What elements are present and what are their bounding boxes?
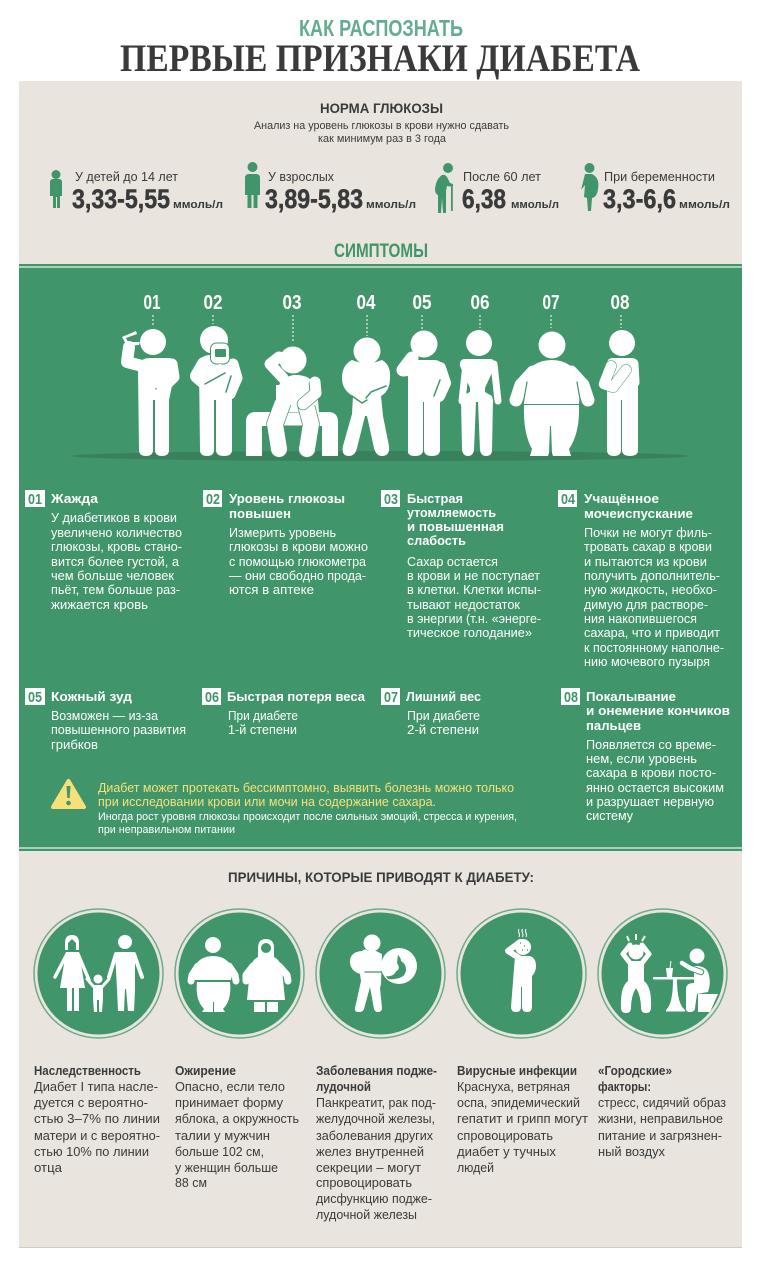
- stat: after 60: 6,38: [462, 184, 506, 214]
- symptom 07: Лишний вес: [406, 689, 481, 704]
- figure 03: fatigue: [246, 292, 338, 456]
- symptom 04: сахара, что и приводит: [584, 626, 720, 640]
- symptom 01: увеличено количество: [51, 526, 182, 540]
- icon: child: [50, 170, 62, 208]
- symptom 04: Учащённое: [584, 491, 659, 506]
- symptom 02: повышен: [229, 506, 291, 521]
- title: ПЕРВЫЕ ПРИЗНАКИ ДИАБЕТА: [120, 37, 640, 80]
- icon: adult: [245, 162, 260, 208]
- stat: after 60: После 60 лет: [463, 169, 541, 184]
- symptom 03: слабость: [407, 533, 466, 548]
- cause text: urban factors: [598, 1064, 726, 1159]
- cause text: obesity: Опасно, если тело: [175, 1080, 285, 1094]
- title: КАК РАСПОЗНАТЬ: [299, 15, 463, 41]
- symptom 07: 07: [384, 689, 398, 706]
- cause text: urban factors: питание и загрязнен-: [598, 1129, 722, 1143]
- figure 01: thirst: [122, 292, 176, 456]
- symptom 04: к постоянному наполне-: [584, 641, 724, 655]
- cause text: pancreas: секреции – могут: [316, 1161, 421, 1175]
- symptom 04: ную жидкость, необхо-: [584, 583, 717, 597]
- symptom 07: [381, 688, 481, 737]
- symptom 01: глюкозы, кровь стано-: [51, 540, 182, 554]
- icon: urban factors: [598, 909, 727, 1038]
- stat: pregnancy: 3,3-6,6: [603, 184, 676, 214]
- heading: symptoms: СИМПТОМЫ: [334, 241, 428, 262]
- symptom 01: 01: [28, 491, 42, 508]
- symptom 03: в энергии (т.н. «энерге-: [407, 612, 541, 626]
- cause text: heredity: Диабет I типа насле-: [34, 1080, 158, 1094]
- stat: adults: ммоль/л: [366, 199, 416, 211]
- symptom 06: 06: [205, 689, 219, 706]
- cause text: obesity: 88 см: [175, 1176, 207, 1190]
- symptom 01: чем больше человек: [51, 569, 175, 583]
- cause text: heredity: стью 3–7% по линии: [34, 1112, 160, 1126]
- cause text: obesity: принимает форму: [175, 1096, 284, 1110]
- callout: warning: Диабет может протекать бессимптомно, выявить болезнь можно только: [98, 781, 514, 795]
- callout: warning: при неправильном питании: [98, 824, 235, 836]
- cause text: obesity: яблока, а окружность: [175, 1112, 299, 1126]
- symptom 02: ются в аптеке: [229, 583, 314, 597]
- symptom 07: При диабете: [407, 709, 480, 723]
- symptom 03: [381, 490, 541, 640]
- symptom 06: При диабете: [228, 709, 298, 723]
- text: analysis note: как минимум раз в 3 года: [318, 133, 447, 145]
- symptom 02: глюкозы в крови можно: [229, 540, 368, 554]
- symptom 01: У диабетиков в крови: [51, 511, 177, 525]
- cause text: viral infections: Вирусные инфекции: [457, 1064, 577, 1078]
- icon: pancreas disease: [316, 909, 445, 1038]
- cause text: heredity: [34, 1064, 160, 1175]
- symptom 01: [25, 490, 182, 612]
- symptom 08: [561, 688, 730, 823]
- figure 07: overweight: [516, 292, 588, 456]
- symptom 08: Покалывание: [586, 689, 676, 704]
- symptom 04: ния накопившегося: [584, 612, 697, 626]
- figure 07: overweight: 07: [542, 292, 560, 314]
- symptom 04: [558, 490, 724, 669]
- symptom 02: — они свободно прода-: [229, 569, 366, 583]
- callout: warning: при исследовании крови или мочи на содержание сахара.: [98, 795, 436, 809]
- cause text: urban factors: жизни, неправильное: [598, 1112, 723, 1126]
- cause text: heredity: стью 10% по линии: [34, 1145, 149, 1159]
- cause text: viral infections: людей: [457, 1161, 494, 1175]
- symptom 04: Почки не могут филь-: [584, 526, 712, 540]
- cause text: pancreas: Заболевания поджe-: [316, 1064, 437, 1078]
- heading: glucose norm: НОРМА ГЛЮКОЗЫ: [320, 100, 443, 116]
- symptom 06: Быстрая потеря веса: [227, 689, 366, 704]
- cause text: obesity: талии у мужчин: [175, 1129, 270, 1143]
- symptom 05: повышенного развития: [51, 723, 186, 737]
- icon: warning triangle: [53, 781, 84, 807]
- stat: after 60: [435, 163, 559, 214]
- cause text: viral infections: [457, 1064, 588, 1175]
- figure 06: weight loss: [460, 292, 498, 456]
- symptom 06: 1-й степени: [228, 723, 297, 737]
- symptom 04: 04: [561, 491, 576, 508]
- symptom 05: грибков: [51, 738, 98, 752]
- figure 03: fatigue: 03: [282, 292, 302, 314]
- symptom 08: Появляется со време-: [586, 738, 716, 752]
- stat: adults: 3,89-5,83: [265, 184, 363, 214]
- cause text: heredity: отца: [34, 1161, 62, 1175]
- floor shadow: [72, 451, 688, 461]
- figure 04: frequent urination: [342, 292, 390, 456]
- icon: heredity: [34, 909, 163, 1038]
- cause text: pancreas: заболевания других: [316, 1129, 434, 1143]
- stat: pregnancy: [581, 163, 730, 214]
- symptom 03: 03: [384, 491, 398, 508]
- symptom 01: пьёт, тем больше раз-: [51, 583, 180, 597]
- symptom 08: и разрушает нервную: [586, 795, 714, 809]
- cause text: pancreas: спровоцировать: [316, 1176, 412, 1190]
- cause text: heredity: дуется с вероятно-: [34, 1096, 148, 1110]
- figure 06: weight loss: 06: [470, 292, 490, 314]
- symptom 02: [203, 490, 368, 597]
- symptom 04: мочеиспускание: [584, 506, 693, 521]
- callout: warning: Иногда рост уровня глюкозы происходит после сильных эмоций, стресса и курения,: [98, 811, 517, 823]
- cause text: pancreas: желез внутренней: [316, 1145, 424, 1159]
- symptom 04: нию мочевого пузыря: [584, 655, 710, 669]
- cause text: viral infections: гепатит и грипп могут: [457, 1112, 588, 1126]
- cause text: viral infections: оспа, эпидемический: [457, 1096, 580, 1110]
- symptom 01: Жажда: [50, 491, 99, 506]
- stat: after 60: ммоль/л: [511, 199, 559, 211]
- symptom 03: и повышенная: [407, 519, 504, 534]
- stat: children: У детей до 14 лет: [75, 169, 178, 184]
- figure 01: thirst: 01: [144, 292, 160, 314]
- cause text: urban factors: «Городские»: [598, 1064, 672, 1078]
- symptom 02: Уровень глюкозы: [229, 491, 345, 506]
- figure 08: numbness: 08: [610, 292, 630, 314]
- stat: children: [50, 169, 223, 214]
- figure 02: glucose meter: 02: [204, 292, 222, 314]
- cause text: pancreas: лудочной железы: [316, 1208, 417, 1222]
- icon: viral infections: [457, 909, 586, 1038]
- text: analysis note: [254, 120, 509, 145]
- symptom 03: Быстрая: [407, 491, 463, 506]
- cause text: pancreas: [316, 1064, 437, 1222]
- cause text: heredity: матери и с вероятно-: [34, 1129, 160, 1143]
- symptom 03: в крови и не поступает: [407, 569, 540, 583]
- cause text: heredity: Наследственность: [34, 1064, 141, 1078]
- text: analysis note: Анализ на уровень глюкозы в крови нужно сдавать: [254, 120, 509, 132]
- callout: warning: [53, 781, 517, 836]
- symptom 05: Возможен — из-за: [51, 709, 158, 723]
- cause text: obesity: у женщин больше: [175, 1161, 278, 1175]
- symptom 08: нем, если уровень: [586, 752, 697, 766]
- symptom 04: димую для растворе-: [584, 598, 708, 612]
- symptom 02: Измерить уровень: [229, 526, 336, 540]
- stat: pregnancy: ммоль/л: [679, 199, 730, 211]
- cause text: pancreas: лудочной: [316, 1080, 371, 1094]
- stat: adults: [245, 162, 416, 214]
- symptom 08: систему: [586, 809, 634, 823]
- cause text: urban factors: ный воздух: [598, 1145, 666, 1159]
- cause text: obesity: больше 102 см,: [175, 1145, 264, 1159]
- symptom 01: жижается кровь: [51, 598, 148, 612]
- symptom 06: [202, 688, 366, 737]
- cause text: obesity: [175, 1064, 299, 1190]
- symptom 02: 02: [206, 491, 220, 508]
- symptom 04: получить дополнитель-: [584, 569, 720, 583]
- icon: pregnant woman: [581, 163, 598, 211]
- symptom 03: Сахар остается: [407, 555, 498, 569]
- symptom 03: тическое голодание»: [407, 626, 532, 640]
- symptom 03: утомляемость: [407, 505, 496, 520]
- figure 02: glucose meter: [197, 292, 237, 456]
- symptom 08: 08: [564, 689, 578, 706]
- stat: adults: У взрослых: [268, 169, 334, 184]
- symptom 03: в клетки. Клетки испы-: [407, 583, 541, 597]
- panel: symptoms: [19, 264, 742, 851]
- cause text: urban factors: стресс, сидячий образ: [598, 1096, 726, 1110]
- cause text: pancreas: желудочной железы,: [316, 1112, 435, 1126]
- figure 05: itching: [403, 292, 445, 456]
- cause text: obesity: Ожирение: [175, 1064, 236, 1078]
- figure 08: numbness: [604, 292, 638, 456]
- symptom 05: 05: [28, 689, 42, 706]
- cause text: viral infections: диабет у тучных: [457, 1145, 557, 1159]
- symptom 05: Кожный зуд: [51, 689, 133, 704]
- symptom 05: [25, 688, 186, 752]
- stat: children: 3,33-5,55: [72, 184, 170, 214]
- figure 05: itching: 05: [412, 292, 432, 314]
- symptom 07: 2-й степени: [407, 723, 479, 737]
- cause text: pancreas: дисфункцию поджe-: [316, 1192, 432, 1206]
- symptom 08: и онемение кончиков: [586, 703, 730, 718]
- symptom 02: с помощью глюкометра: [229, 555, 366, 569]
- cause text: viral infections: Краснуха, ветряная: [457, 1080, 570, 1094]
- symptom 03: тывают недостаток: [407, 598, 521, 612]
- stat: pregnancy: При беременности: [604, 169, 715, 184]
- symptom 08: янно остается высоким: [586, 781, 724, 795]
- cause text: pancreas: Панкреатит, рак под-: [316, 1096, 436, 1110]
- symptom 01: вится более густой, а: [51, 555, 179, 569]
- cause text: viral infections: спровоцировать: [457, 1129, 553, 1143]
- symptom 04: и пытаются из крови: [584, 555, 707, 569]
- figure 04: frequent urination: 04: [356, 292, 376, 314]
- icon: obesity: [175, 909, 304, 1038]
- icon: elderly person: [435, 163, 453, 213]
- cause text: urban factors: факторы:: [598, 1080, 651, 1094]
- symptom 08: пальцев: [586, 718, 641, 733]
- symptom 08: сахара в крови посто-: [586, 766, 716, 780]
- symptom 04: тровать сахар в крови: [584, 540, 712, 554]
- heading: causes: ПРИЧИНЫ, КОТОРЫЕ ПРИВОДЯТ К ДИАБЕТУ:: [228, 869, 534, 885]
- title: [120, 15, 640, 80]
- stat: children: ммоль/л: [173, 199, 223, 211]
